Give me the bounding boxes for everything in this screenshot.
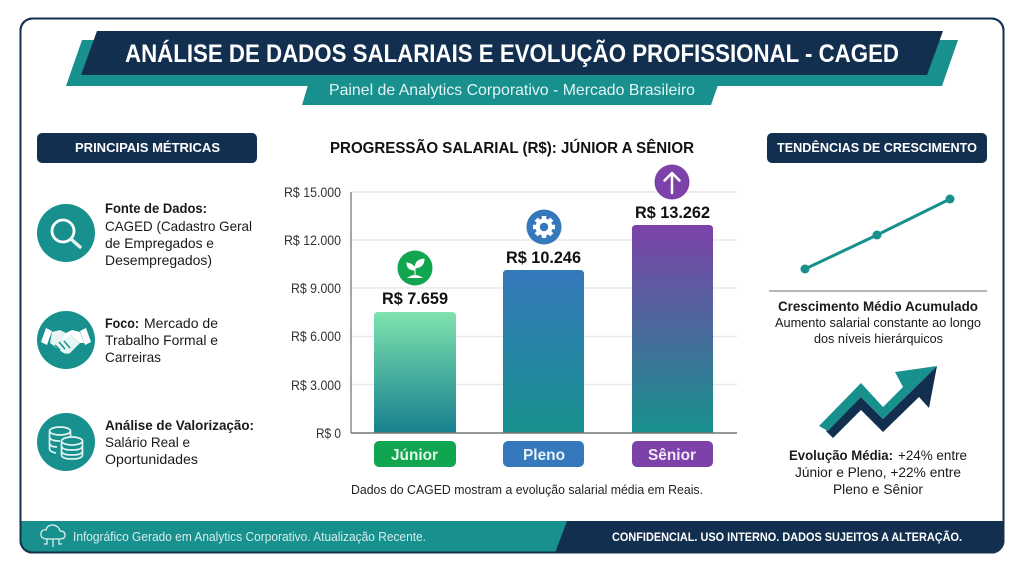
icon: sprout bbox=[398, 250, 432, 286]
icon: zigzag arrow bbox=[819, 366, 937, 438]
category label: pleno bbox=[503, 441, 584, 467]
footer bbox=[20, 521, 1004, 553]
heading: tendências bbox=[767, 133, 987, 163]
y axis labels: R$ 0 bbox=[316, 426, 341, 441]
icon: cloud network bbox=[41, 525, 65, 547]
panel: principais métricas bbox=[37, 133, 257, 471]
y axis labels: R$ 15.000 bbox=[284, 185, 341, 200]
bar chart bbox=[284, 164, 737, 467]
icon: coins bbox=[37, 413, 95, 471]
heading: principais métricas: PRINCIPAIS MÉTRICAS bbox=[75, 140, 220, 155]
category label: sênior bbox=[632, 441, 713, 467]
text: fonte de dados: CAGED (Cadastro Geral bbox=[105, 218, 252, 234]
category label: pleno: Pleno bbox=[523, 447, 565, 464]
text: foco: Foco: bbox=[105, 315, 139, 331]
icon: up arrow bbox=[654, 164, 690, 200]
icon: handshake bbox=[37, 311, 95, 369]
icon: magnifier bbox=[37, 204, 95, 262]
y axis labels: R$ 3.000 bbox=[291, 378, 341, 393]
text: crescimento médio: dos níveis hierárquicos bbox=[814, 331, 943, 346]
subtitle ribbon: Painel de Analytics Corporativo - Mercado Brasileiro bbox=[329, 82, 695, 99]
text: análise de valorização: Salário Real e bbox=[105, 434, 190, 450]
footer left text: Infográfico Gerado em Analytics Corporativo. Atualização Recente. bbox=[73, 530, 426, 544]
value labels: R$ 13.262 bbox=[635, 203, 710, 222]
panel: tendências de crescimento bbox=[767, 133, 987, 497]
text: crescimento médio bbox=[775, 298, 981, 346]
heading: tendências: TENDÊNCIAS DE CRESCIMENTO bbox=[777, 140, 977, 155]
category label: sênior: Sênior bbox=[648, 447, 696, 464]
icon: gear bbox=[526, 210, 562, 244]
text: análise de valorização: Oportunidades bbox=[105, 451, 198, 467]
y axis labels: R$ 9.000 bbox=[291, 281, 341, 296]
bar: sênior bbox=[632, 225, 713, 433]
text: crescimento médio: Crescimento Médio Acumulado bbox=[778, 298, 978, 314]
text: análise de valorização bbox=[105, 417, 254, 467]
subtitle ribbon bbox=[302, 82, 718, 105]
text: evolução média: Júnior e Pleno, +22% entre bbox=[795, 464, 961, 480]
y axis labels: R$ 12.000 bbox=[284, 233, 341, 248]
text: fonte de dados: Fonte de Dados: bbox=[105, 200, 207, 216]
bar: pleno bbox=[503, 270, 584, 433]
heading: principais métricas bbox=[37, 133, 257, 163]
text: evolução média: Pleno e Sênior bbox=[833, 481, 923, 497]
chart title: PROGRESSÃO SALARIAL (R$): JÚNIOR A SÊNIOR bbox=[330, 137, 694, 157]
value labels: R$ 10.246 bbox=[506, 248, 581, 267]
y axis labels bbox=[284, 185, 341, 441]
line chart bbox=[769, 194, 987, 291]
title banner bbox=[66, 31, 958, 86]
chart caption: Dados do CAGED mostram a evolução salarial média em Reais. bbox=[351, 482, 703, 497]
text: foco: Trabalho Formal e bbox=[105, 332, 218, 348]
text: foco: Mercado de bbox=[144, 315, 218, 331]
text: evolução média bbox=[789, 447, 967, 497]
text: crescimento médio: Aumento salarial constante ao longo bbox=[775, 315, 981, 330]
value labels: R$ 7.659 bbox=[382, 289, 448, 308]
text: foco bbox=[105, 315, 218, 365]
category label: júnior: Júnior bbox=[391, 447, 438, 464]
text: análise de valorização: Análise de Valorização: bbox=[105, 417, 254, 433]
text: evolução média: Evolução Média: bbox=[789, 447, 893, 463]
text: fonte de dados: Desempregados) bbox=[105, 252, 212, 268]
text: evolução média: +24% entre bbox=[898, 447, 967, 463]
footer right text: CONFIDENCIAL. USO INTERNO. DADOS SUJEITOS A ALTERAÇÃO. bbox=[612, 529, 962, 544]
y axis labels: R$ 6.000 bbox=[291, 329, 341, 344]
category label: júnior bbox=[374, 441, 456, 467]
text: fonte de dados: de Empregados e bbox=[105, 235, 214, 251]
title: ANÁLISE DE DADOS SALARIAIS E EVOLUÇÃO PROFISSIONAL - CAGED bbox=[125, 38, 899, 68]
value labels bbox=[382, 203, 710, 308]
text: foco: Carreiras bbox=[105, 349, 161, 365]
bar: júnior bbox=[374, 312, 456, 433]
text: fonte de dados bbox=[105, 200, 252, 268]
